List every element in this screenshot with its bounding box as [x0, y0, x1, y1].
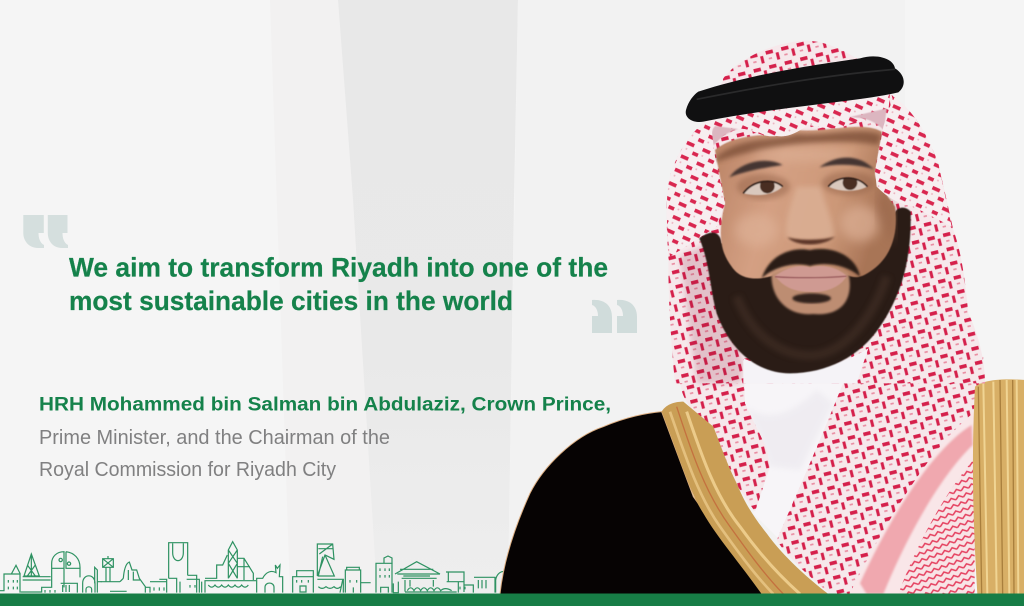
white thobe	[713, 350, 867, 540]
quote text: We aim to transform Riyadh into one of the	[69, 252, 608, 282]
pale shemagh border	[849, 412, 975, 594]
gold trim left	[662, 402, 828, 594]
shemagh headcloth	[667, 41, 985, 383]
bottom green bar	[0, 594, 1024, 606]
icon: opening quotation mark	[23, 215, 68, 248]
chin skin	[772, 266, 850, 314]
attribution: name: HRH Mohammed bin Salman bin Abdulaziz, Crown Prince,	[39, 394, 611, 416]
pink stripe	[860, 425, 973, 594]
black agal	[686, 56, 904, 122]
black cloak	[500, 412, 763, 594]
eye socket shading	[737, 171, 875, 199]
lip line	[775, 276, 847, 278]
beard highlight texture	[737, 277, 887, 355]
headband folds	[700, 93, 890, 147]
cheek highlights	[735, 149, 880, 247]
shemagh right fold	[777, 357, 983, 594]
lips	[775, 266, 847, 292]
chevron weave	[898, 458, 975, 594]
forehead hairline shadow	[715, 131, 882, 162]
left headcloth flap	[667, 120, 725, 257]
gold trim right	[973, 379, 1024, 594]
white neck	[743, 348, 868, 383]
thobe collar shadow	[747, 390, 833, 470]
attribution: titles	[39, 426, 390, 481]
soul patch	[792, 293, 831, 303]
moustache	[762, 249, 860, 278]
icon: closing quotation mark	[592, 300, 637, 333]
nose	[786, 187, 835, 244]
temple shading	[877, 177, 896, 243]
eyebrows	[729, 158, 874, 177]
right headcloth flap	[875, 97, 952, 227]
attribution: titles: Royal Commission for Riyadh City	[39, 458, 337, 481]
drape fold shadow	[680, 243, 743, 383]
beard	[699, 208, 911, 373]
right eye	[827, 176, 868, 192]
attribution: titles: Prime Minister, and the Chairman of the	[39, 426, 390, 449]
portrait: head and headdress	[667, 41, 985, 383]
shemagh left drape	[675, 360, 770, 512]
left eye	[742, 180, 784, 196]
Riyadh skyline illustration	[0, 542, 505, 593]
portrait: robe and shoulders	[500, 350, 1024, 594]
quote text: most sustainable cities in the world	[69, 286, 513, 316]
face skin	[715, 127, 896, 279]
pink underside of headband	[711, 108, 887, 147]
quote text	[69, 252, 608, 316]
